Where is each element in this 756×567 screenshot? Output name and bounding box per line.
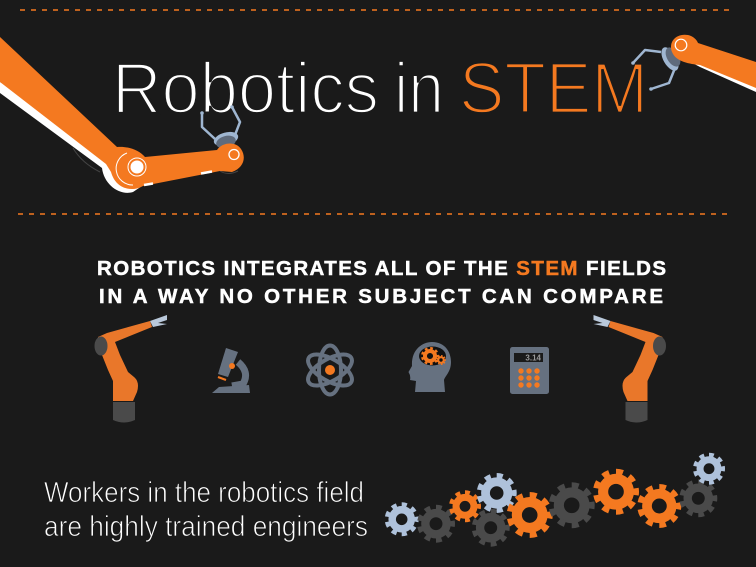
bottom text: are highly trained engineers — [44, 511, 368, 543]
title: Robotics — [112, 49, 379, 129]
subheading: IN A WAY NO OTHER SUBJECT CAN COMPARE — [99, 285, 663, 308]
icon: calculator — [510, 347, 549, 394]
icon: microscope — [212, 348, 250, 393]
large robot arm left — [0, 37, 244, 193]
icon: atom — [303, 346, 357, 394]
gripper left — [200, 105, 240, 150]
icon: calculator: 3.14 — [525, 354, 542, 362]
icon: head with gears — [408, 342, 451, 392]
title: STEM — [459, 49, 648, 129]
title: in — [394, 49, 444, 129]
robot arm right — [671, 35, 756, 92]
bottom text: Workers in the robotics field — [44, 477, 364, 509]
title — [112, 49, 648, 129]
gripper right — [631, 44, 683, 91]
robot left — [94, 315, 167, 422]
subheading: ROBOTICS INTEGRATES ALL OF THE STEM FIELDS — [97, 257, 666, 280]
gears — [387, 455, 723, 544]
robot right — [594, 315, 666, 422]
bottom text — [44, 477, 368, 543]
subheading — [97, 257, 666, 308]
